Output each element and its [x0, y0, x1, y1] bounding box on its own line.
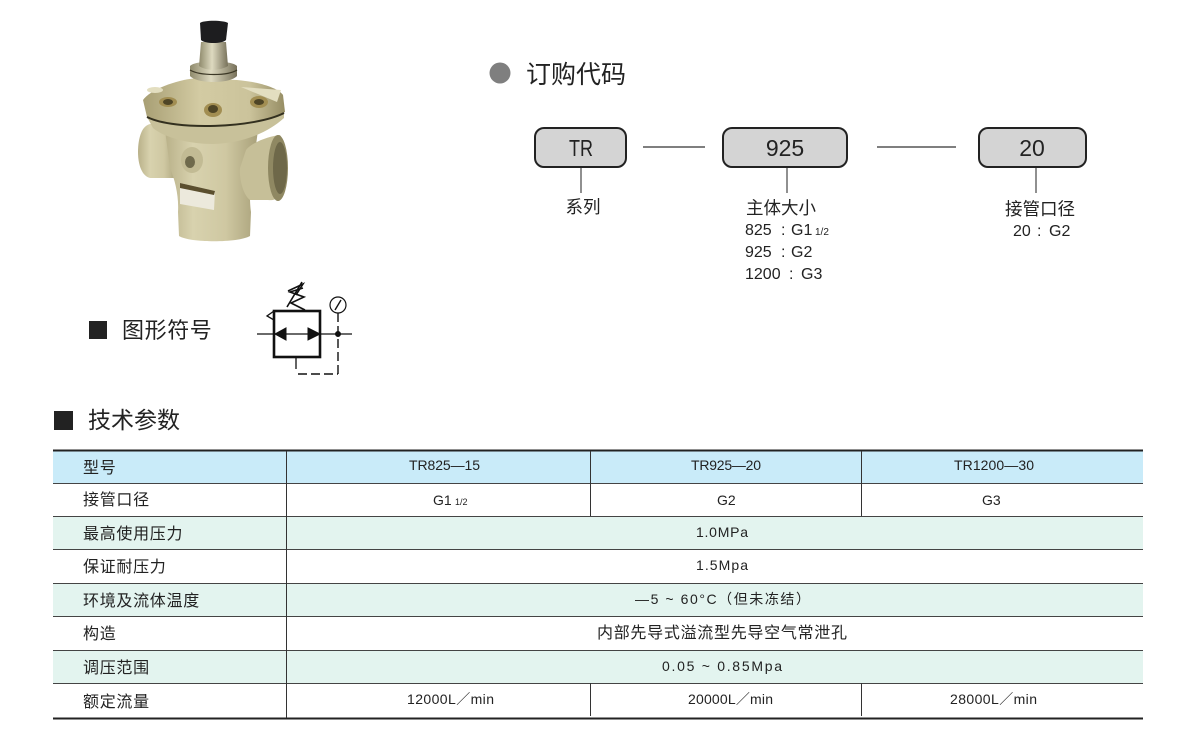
body flange [147, 113, 284, 144]
row values [407, 457, 1037, 707]
row values: TR825—15 [409, 457, 480, 473]
order code: series TR: TR [569, 135, 593, 161]
order code: body size 925: : [789, 266, 793, 283]
row labels: 环境及流体温度 [83, 591, 200, 610]
order code: series TR: 系列 [566, 197, 600, 217]
row values: 1.5Mpa [696, 557, 748, 573]
order code: port size 20 [979, 128, 1086, 240]
row values: G1 [433, 492, 452, 508]
row values: G3 [982, 492, 1001, 508]
order code: port size 20: 20 [1019, 135, 1045, 161]
technical parameters heading: 技术参数 [88, 407, 180, 433]
row values: 0.05 ~ 0.85Mpa [662, 658, 782, 674]
row labels: 接管口径 [83, 491, 150, 509]
row values: 28000L／min [950, 691, 1037, 707]
nameplate [180, 183, 215, 210]
cap screws [159, 97, 177, 107]
order code: body size 925: G1 [791, 222, 812, 239]
order code heading: 订购代码 [526, 61, 626, 89]
order code: body size 925: G3 [801, 266, 822, 283]
row labels: 最高使用压力 [83, 525, 183, 543]
row labels: 保证耐压力 [83, 558, 167, 576]
row values: 20000L／min [688, 691, 773, 707]
order code: body size 925: 925 [745, 244, 772, 261]
order code: series TR [535, 128, 626, 217]
order code: port size 20: 20 [1013, 223, 1031, 240]
symbol heading: 图形符号 [122, 318, 212, 343]
order code: body size 925: 825 [745, 222, 772, 239]
valve lower body [165, 130, 258, 241]
connector dash [643, 146, 705, 148]
order code: body size 925: : [781, 244, 785, 261]
order code: port size 20: 接管口径 [1005, 199, 1075, 219]
row values: —5 ~ 60°C（但未冻结） [635, 591, 810, 607]
row labels [83, 459, 200, 711]
row values: TR1200—30 [954, 457, 1034, 473]
product photo: pressure regulator valve [138, 21, 288, 241]
row labels: 调压范围 [83, 659, 150, 677]
row values: TR925—20 [691, 457, 761, 473]
left port [138, 124, 178, 178]
order code: body size 925: 主体大小 [746, 198, 816, 218]
row values: G2 [717, 492, 736, 508]
order code: body size 925: 1/2 [815, 227, 829, 238]
neck [199, 42, 228, 70]
row labels: 构造 [83, 625, 116, 643]
row values: 12000L／min [407, 691, 494, 707]
collar [190, 62, 237, 82]
dome cover [143, 78, 285, 126]
black knob [200, 21, 228, 43]
side pilot port [181, 147, 203, 173]
order code: body size 925: 925 [766, 135, 804, 161]
row values: 1/2 [455, 497, 468, 507]
row labels: 额定流量 [83, 693, 150, 711]
order code: body size 925 [723, 128, 847, 283]
order code: body size 925: : [781, 222, 785, 239]
row backgrounds [53, 451, 1143, 683]
order code: port size 20: : [1037, 223, 1041, 240]
pneumatic symbol [257, 282, 352, 374]
order code: body size 925: 1200 [745, 266, 781, 283]
right port [240, 135, 287, 200]
order code: body size 925: G2 [791, 244, 812, 261]
row values: 内部先导式溢流型先导空气常泄孔 [597, 624, 847, 642]
order code: port size 20: G2 [1049, 223, 1070, 240]
row labels: 型号 [83, 459, 116, 477]
row values: 1.0MPa [696, 524, 748, 540]
specification table [53, 450, 1143, 718]
connector dash [877, 146, 956, 148]
